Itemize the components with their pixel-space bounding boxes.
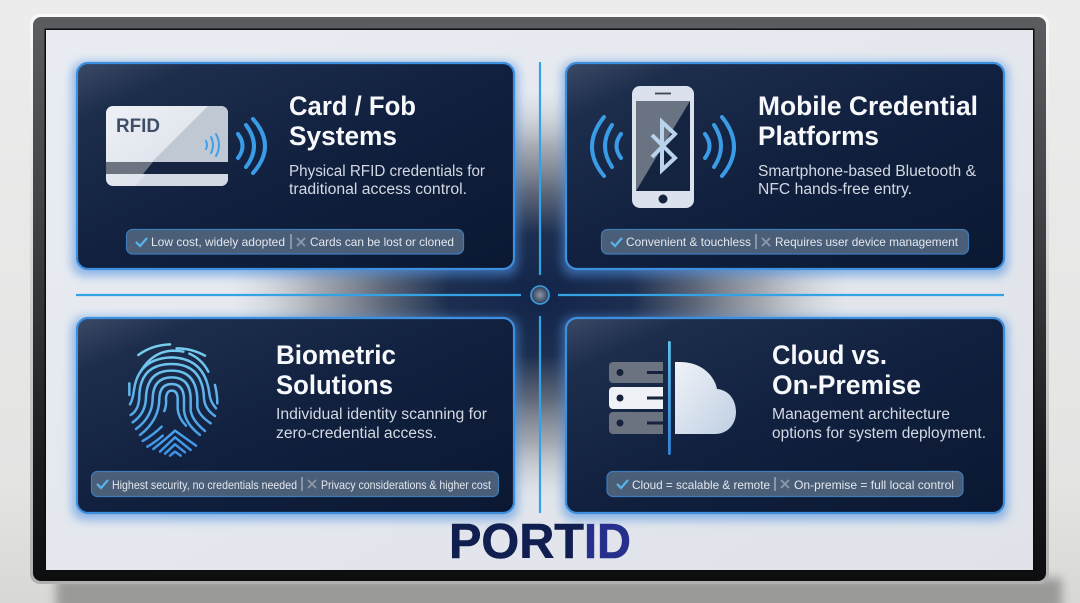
description: zero-credential access. (276, 425, 437, 442)
pros and cons bar: Cloud = scalable & remote (632, 478, 770, 492)
logo: PortID: PORT (449, 515, 584, 569)
heading (289, 91, 416, 151)
icon: RFID card (106, 106, 228, 186)
panel: cloud vs on-premise (562, 317, 1008, 520)
pros and cons bar (602, 230, 968, 254)
pros and cons bar: Privacy considerations & higher cost (321, 478, 492, 492)
icon: fingerprint (129, 344, 217, 456)
heading: Solutions (276, 370, 393, 400)
logo: PortID: ID (584, 515, 631, 569)
pros and cons bar: Highest security, no credentials needed (112, 478, 297, 492)
icon: server and cloud (609, 341, 736, 455)
description: NFC hands-free entry. (758, 181, 912, 198)
center divider cross (76, 62, 1004, 513)
description (772, 406, 986, 442)
panel: mobile credential platforms (562, 62, 1008, 276)
pros and cons bar: Low cost, widely adopted (151, 235, 285, 249)
description: Physical RFID credentials for (289, 163, 485, 180)
pros and cons bar: Requires user device management (775, 235, 959, 249)
icon: wireless waves (592, 117, 734, 176)
icon: RFID card: RFID (116, 116, 160, 137)
description (758, 163, 977, 198)
description: options for system deployment. (772, 425, 986, 442)
heading: Card / Fob (289, 91, 416, 121)
description: Management architecture (772, 406, 950, 423)
pros and cons bar (126, 230, 464, 254)
description: Smartphone-based Bluetooth & (758, 163, 977, 180)
heading (772, 340, 921, 400)
pros and cons bar: On-premise = full local control (794, 478, 954, 492)
center glow (230, 90, 850, 500)
pros and cons bar: Cards can be lost or cloned (310, 235, 454, 249)
heading (276, 340, 396, 400)
description: Individual identity scanning for (276, 406, 487, 423)
heading: Platforms (758, 121, 879, 151)
heading: Cloud vs. (772, 340, 887, 370)
pros and cons bar: Convenient & touchless (626, 235, 751, 249)
heading: Biometric (276, 340, 396, 370)
pros and cons bar (92, 472, 498, 496)
panel: biometric solutions (72, 317, 518, 520)
description: traditional access control. (289, 181, 467, 198)
heading (758, 91, 978, 151)
pros and cons bar (607, 472, 963, 496)
panel: card / fob systems (72, 62, 518, 276)
heading: On-Premise (772, 370, 921, 400)
description (289, 163, 485, 198)
heading: Mobile Credential (758, 91, 978, 121)
heading: Systems (289, 121, 397, 151)
icon: smartphone with bluetooth (632, 86, 694, 208)
icon: radio waves (238, 119, 265, 173)
description (276, 406, 487, 442)
